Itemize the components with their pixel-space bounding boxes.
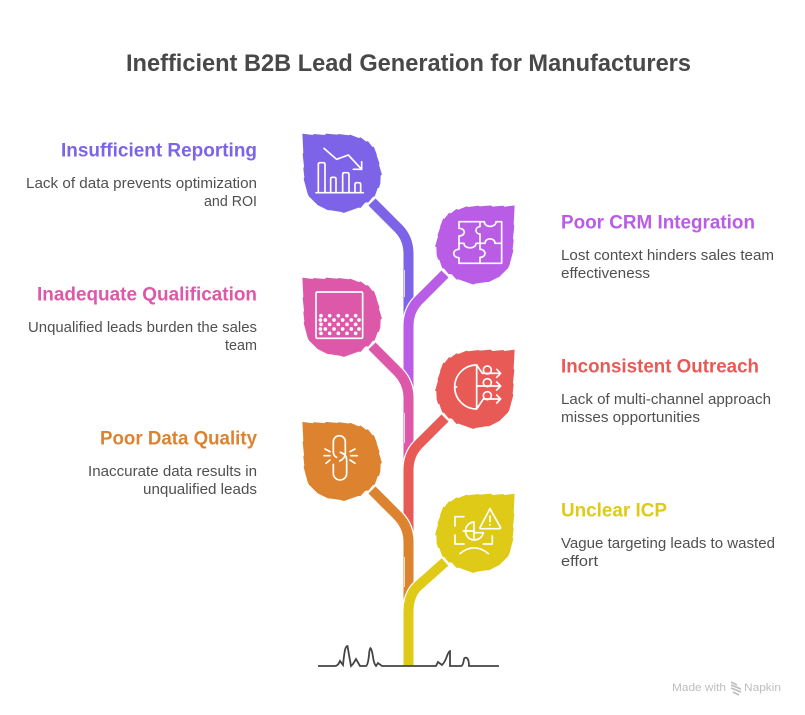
heading: Unclear ICP [561,500,667,522]
footer: Made with Napkin: Made with [672,682,726,694]
description: and ROI [204,194,257,210]
description [561,392,771,426]
ground with grass [318,646,499,666]
branch: Unclear ICP leaf and stem [408,493,515,666]
branch: Poor Data Quality leaf and stem [302,422,408,613]
description: effort [561,554,598,570]
description: Unqualified leads burden the sales [28,320,257,336]
description: unqualified leads [143,482,257,498]
description [561,536,775,570]
icon: puzzle pieces [454,222,502,263]
panel: Inconsistent Outreach [561,356,771,426]
description: Vague targeting leads to wasted [561,536,775,552]
panel: Poor Data Quality [88,428,257,498]
description [88,464,257,498]
heading: Poor Data Quality [100,428,257,450]
panel: Insufficient Reporting [26,140,257,210]
description: effectiveness [561,266,650,282]
description: team [225,338,257,354]
heading: Inadequate Qualification [37,284,257,306]
description [28,320,257,354]
branch: Inadequate Qualification leaf and stem [302,277,408,469]
branch: Inconsistent Outreach leaf and stem [408,349,515,539]
branch: Poor CRM Integration leaf and stem [408,205,515,395]
icon: broken chain link [324,436,357,480]
icon: half circle with three arrows [455,365,501,409]
panel: Poor CRM Integration [561,212,774,282]
footer: Made with Napkin [672,682,781,695]
heading: Insufficient Reporting [61,140,257,162]
description: Inaccurate data results in [88,464,257,480]
panel: Unclear ICP [561,500,775,570]
icon: partly filled box [316,292,363,338]
icon: declining bar chart [316,148,363,193]
description: Lack of multi-channel approach [561,392,771,408]
description: Lack of data prevents optimization [26,176,257,192]
icon: target with warning triangle [455,509,501,554]
description [26,176,257,210]
description: Lost context hinders sales team [561,248,774,264]
description [561,248,774,282]
branch: Insufficient Reporting leaf and stem [302,133,408,325]
description: misses opportunities [561,410,700,426]
title: Inefficient B2B Lead Generation for Manufacturers [126,50,691,77]
heading: Inconsistent Outreach [561,356,759,378]
footer: Made with Napkin: Napkin [744,682,781,694]
panel: Inadequate Qualification [28,284,257,354]
heading: Poor CRM Integration [561,212,755,234]
